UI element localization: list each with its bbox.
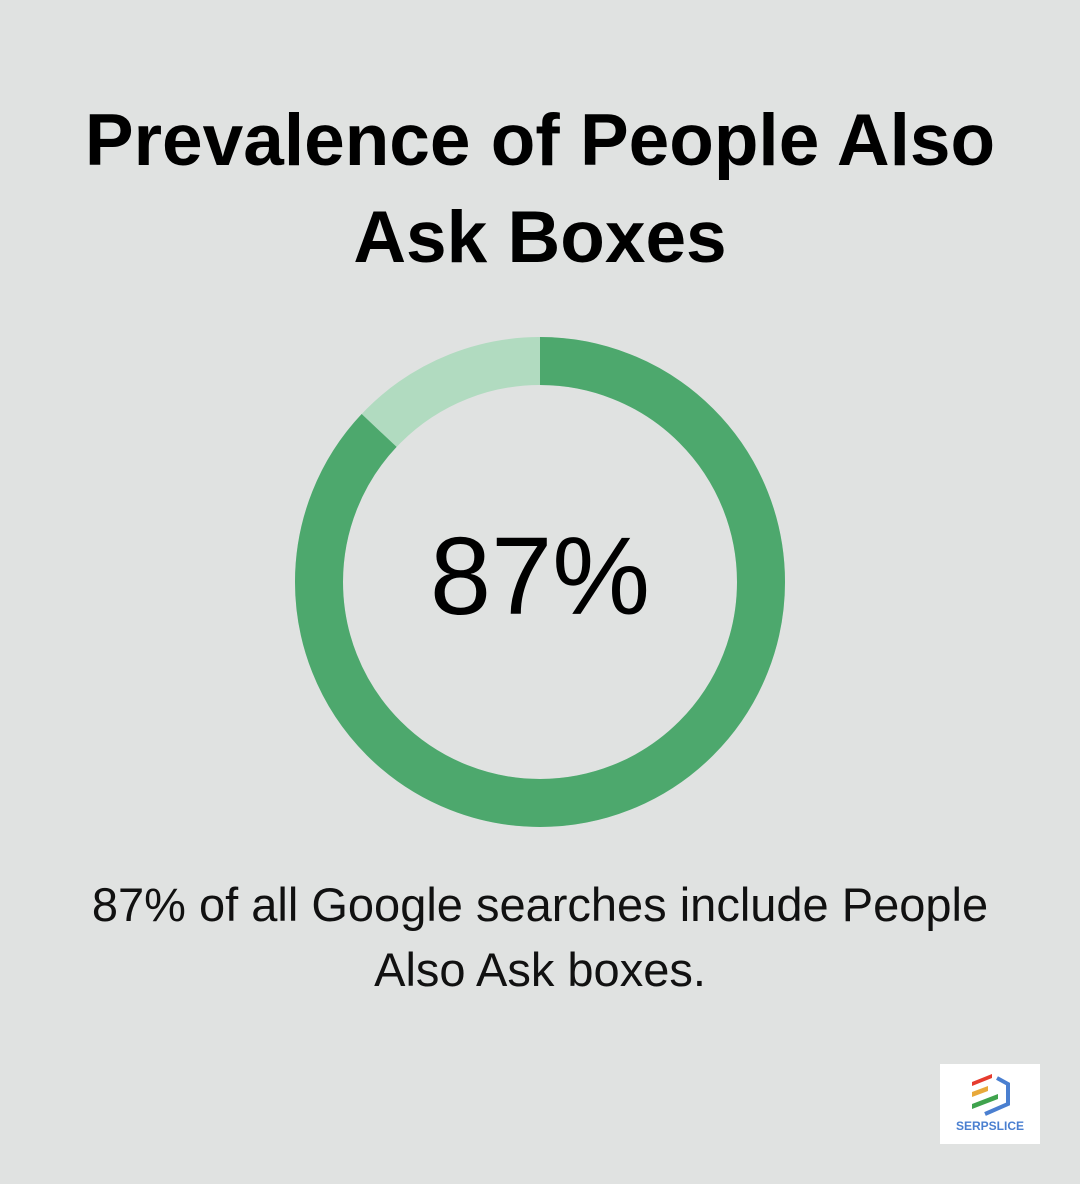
logo: serpslice <box>940 1064 1040 1144</box>
title: Prevalence of People Also <box>85 100 995 181</box>
description text: Also Ask boxes. <box>374 943 706 996</box>
title: Ask Boxes <box>353 197 727 278</box>
description text: 87% of all Google searches include People <box>92 878 988 931</box>
description text <box>92 878 988 996</box>
donut chart: 87% <box>430 515 650 638</box>
logo: serpslice: SERPSLICE <box>956 1119 1024 1133</box>
title <box>85 100 995 278</box>
